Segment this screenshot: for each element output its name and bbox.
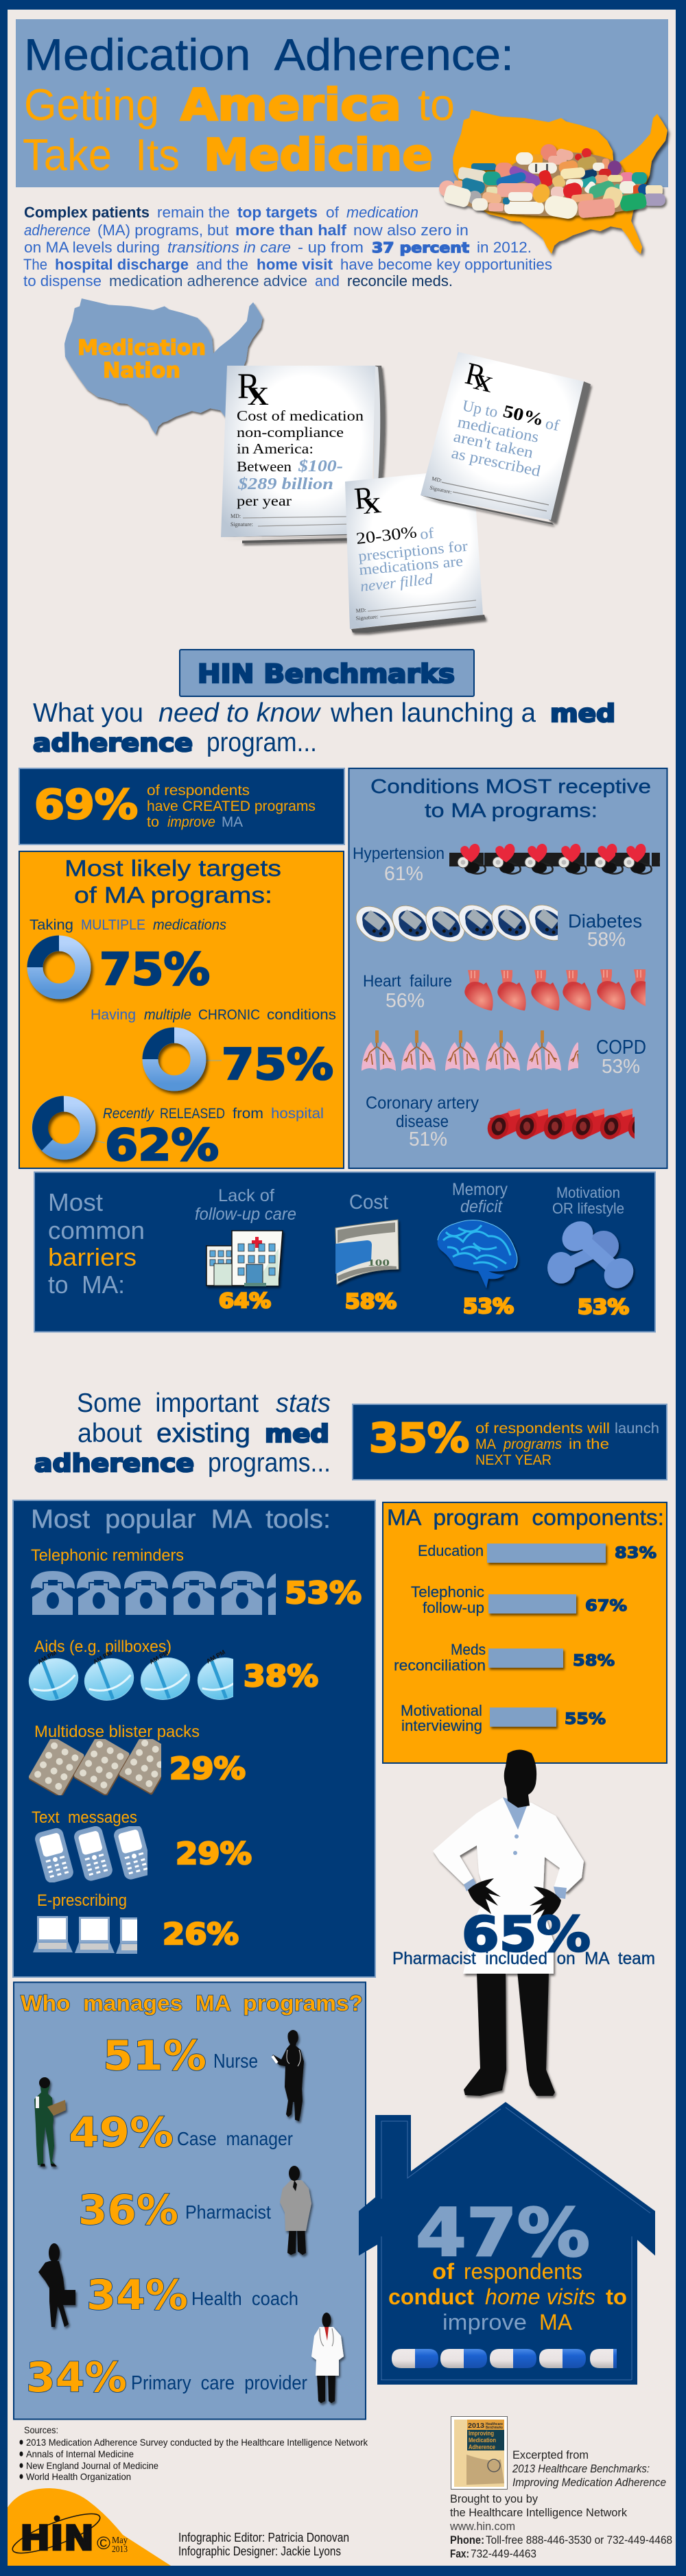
role: nurse [103, 2030, 304, 2121]
bar chart: Education [418, 1542, 484, 1559]
panel heading: MA program components: [387, 1505, 664, 1530]
target: multiple chronic conditions: Having [91, 1007, 136, 1023]
tool: aids [29, 1640, 318, 1701]
tool: text messages [32, 1808, 252, 1884]
intro text: The [23, 256, 47, 273]
tool: aids: AM PM [205, 1649, 226, 1665]
icon: report cover: Benchmarks [486, 2426, 503, 2430]
subheading: existing programs: existing [156, 1419, 250, 1448]
prescription note: cost: $100- [298, 458, 343, 475]
target: multiple medications [29, 917, 226, 995]
medication nation map: Nation [103, 359, 180, 383]
title [23, 29, 514, 181]
prescription note: never filled: prescriptions for [357, 537, 469, 565]
panel: who manages [14, 1983, 366, 2419]
panel heading: of MA programs: [74, 882, 272, 908]
title: America [180, 80, 401, 131]
intro text: transitions in care [167, 239, 291, 256]
barrier: motivation or lifestyle: OR lifestyle [552, 1200, 624, 1217]
intro text: adherence [24, 222, 91, 239]
prescription note: cost: non-compliance [237, 424, 344, 440]
prescription note: not taken: R [462, 355, 489, 394]
prescription note: cost [221, 366, 385, 543]
home visits text: MA [539, 2310, 573, 2335]
barrier: follow-up care: follow-up care [195, 1205, 296, 1224]
publisher info: Improving Medication Adherence [512, 2476, 666, 2489]
intro text: medication [346, 204, 418, 221]
tool: aids: Aids (e.g. pillboxes) [34, 1638, 172, 1656]
barrier: cost: Cost [349, 1191, 389, 1214]
callout: 69%: of respondents [147, 783, 250, 799]
condition: coronary artery disease: disease [396, 1112, 449, 1131]
role: pharmacist [78, 2166, 311, 2255]
subheading: existing programs: Some important [77, 1389, 259, 1418]
icon: US map with pill pile [439, 110, 667, 254]
target: recently released: hospital [271, 1106, 324, 1122]
bar chart [394, 1542, 657, 1734]
prescription note: cost: Signature: [230, 521, 253, 528]
target: multiple chronic conditions: conditions [267, 1007, 336, 1023]
intro text: home visit [257, 256, 333, 273]
icon: report cover: Medication [469, 2437, 496, 2444]
target: multiple chronic conditions: multiple [144, 1007, 191, 1023]
barrier: follow-up care: 64% [219, 1289, 271, 1312]
panel heading: barriers [48, 1243, 137, 1271]
barrier: memory deficit: 53% [463, 1295, 514, 1318]
target: multiple chronic conditions: CHRONIC [198, 1007, 260, 1023]
intro text: to dispense [23, 272, 102, 289]
intro text: have become key opportunities [340, 256, 552, 273]
panel heading [370, 776, 651, 822]
home visits text: conduct [388, 2284, 474, 2309]
credits [178, 2531, 349, 2558]
stat: 65% pharmacist: 65% [462, 1906, 591, 1963]
role: pharmacist: Pharmacist [185, 2201, 271, 2223]
sources [19, 2424, 368, 2482]
bar chart: 58% [573, 1653, 615, 1670]
prescription note: cost: per year [237, 493, 292, 509]
target: recently released: Recently [103, 1106, 154, 1122]
publisher info: 2013 Healthcare Benchmarks: [512, 2462, 650, 2475]
benchmarks heading [180, 650, 474, 696]
condition: diabetes [355, 904, 642, 947]
target: recently released [40, 1104, 324, 1170]
prescription note: cost: Between [237, 458, 292, 475]
logo: HIN: © [97, 2533, 110, 2553]
header panel [16, 19, 668, 187]
tool: multidose blister packs [27, 1723, 246, 1798]
title: Medicine [204, 130, 433, 181]
role: nurse: 51% [103, 2032, 206, 2080]
panel heading: Conditions MOST receptive [370, 776, 651, 798]
icon: report cover: Healthcare [486, 2422, 503, 2426]
prescription note: cost: x [248, 372, 269, 413]
tool: multidose blister packs: 29% [169, 1751, 246, 1786]
callout: 69%: improve [167, 814, 215, 830]
callout: 69%: have CREATED programs [147, 799, 316, 814]
prescription note: not taken: aren't taken [452, 427, 535, 462]
tool: aids: 38% [244, 1659, 318, 1694]
prescription note: not taken: 50% [501, 401, 546, 429]
condition: diabetes: Diabetes [568, 910, 642, 932]
condition: heart failure: 56% [386, 990, 425, 1012]
prescription note: not taken: MD: [431, 475, 442, 484]
prescription note: cost: $289 billion [237, 475, 333, 493]
prescription note: never filled: medications are [358, 552, 464, 578]
publisher info [449, 2448, 672, 2560]
barrier: cost [335, 1191, 399, 1313]
panel: home visits house [359, 2102, 655, 2385]
callout: 35%: 35% [369, 1415, 469, 1461]
condition: hypertension [354, 844, 660, 881]
medication nation map: Medication [78, 336, 206, 360]
callout: 69% [19, 768, 344, 844]
condition: heart failure [363, 969, 659, 1012]
tool: aids: AM PM [92, 1649, 113, 1666]
sources: New England Journal of Medicine [26, 2460, 158, 2471]
bar chart: 67% [585, 1598, 627, 1615]
role: case manager: 49% [69, 2109, 174, 2157]
prescription note: not taken [421, 352, 591, 525]
barrier: follow-up care: Lack of [218, 1186, 274, 1205]
subheading: existing programs: about [78, 1419, 142, 1448]
tool: aids: AM PM [148, 1649, 169, 1666]
prescription note: cost: in America: [237, 440, 314, 457]
intro text: remain the [157, 204, 230, 221]
prescription note: not taken: of [544, 414, 561, 434]
barrier: follow-up care [195, 1186, 296, 1312]
icon: report cover: Improving [469, 2430, 494, 2437]
medication nation map [64, 298, 263, 434]
callout: 35%: NEXT YEAR [475, 1452, 552, 1468]
panel: most likely targets [19, 851, 344, 1170]
publisher info: Excerpted from [512, 2448, 589, 2461]
panel heading: Most [48, 1188, 103, 1216]
subheading: need to know: What you [33, 698, 143, 728]
role: primary care provider [26, 2313, 344, 2403]
intro text: in 2012. [477, 239, 532, 256]
title: Medication Adherence: [24, 29, 514, 80]
barrier: motivation or lifestyle: Motivation [556, 1184, 620, 1201]
title: Getting [24, 80, 159, 130]
tool: e-prescribing: E-prescribing [37, 1891, 127, 1910]
target: multiple chronic conditions: 75% [222, 1039, 333, 1089]
intro text: and the [196, 256, 248, 273]
home visits text: improve [442, 2310, 527, 2335]
credits: Infographic Designer: Jackie Lyons [178, 2544, 341, 2558]
sources: Annals of Internal Medicine [26, 2448, 134, 2459]
title: to [418, 80, 455, 130]
intro text: - up from [298, 239, 364, 256]
panel heading: to MA programs: [425, 800, 598, 822]
callout: 69%: MA [222, 814, 243, 830]
role: primary care provider: Primary care provider [131, 2372, 307, 2394]
condition: coronary artery disease: 51% [409, 1129, 447, 1150]
publisher info: Brought to you by [450, 2492, 538, 2505]
prescription note: never filled: 20-30% [355, 523, 418, 548]
pill pile [439, 144, 665, 220]
prescription note: never filled: MD: [355, 607, 366, 614]
role: health coach [38, 2243, 298, 2327]
barrier: memory deficit [438, 1180, 517, 1318]
condition: COPD [362, 1030, 646, 1078]
intro text: now also zero in [353, 222, 469, 239]
target: multiple medications: 75% [99, 945, 210, 995]
bar chart: Meds [451, 1641, 486, 1658]
intro text: of [326, 204, 340, 221]
condition: COPD: COPD [596, 1037, 646, 1059]
callout: 35%: programs [503, 1437, 562, 1452]
prescription note: never filled: R [353, 480, 375, 516]
barrier: cost: 100 [368, 1258, 390, 1268]
intro text: 37 percent [372, 239, 470, 256]
bar chart: reconciliation [394, 1657, 486, 1674]
bar chart: Motivational [401, 1702, 482, 1719]
condition: hypertension: Hypertension [353, 844, 445, 863]
role: case manager [34, 2077, 293, 2166]
prescription note: never filled: of [419, 524, 435, 543]
logo: HIN: May [112, 2536, 128, 2546]
intro text: (MA) programs, but [97, 222, 228, 239]
prescription note: not taken: Signature: [429, 484, 453, 495]
bar chart: 83% [615, 1545, 657, 1562]
stat: 65% pharmacist [392, 1906, 655, 1968]
logo: HIN: 2013 [112, 2544, 128, 2555]
home visits text [388, 2259, 627, 2335]
target: multiple chronic conditions [91, 1007, 336, 1089]
icon: report cover [451, 2416, 508, 2489]
tool: telephonic reminders: Telephonic reminders [31, 1546, 184, 1565]
panel heading: common [48, 1216, 145, 1244]
bar chart: Telephonic [411, 1583, 484, 1600]
prescription note: cost: MD: [230, 513, 241, 519]
condition: coronary artery disease: Coronary artery [366, 1094, 479, 1113]
subheading: need to know [33, 698, 615, 757]
home visits text: to [606, 2284, 627, 2309]
bar chart: interviewing [401, 1717, 482, 1734]
barrier: motivation or lifestyle [547, 1184, 639, 1319]
condition: hypertension: 61% [384, 863, 423, 885]
barrier: memory deficit: Memory [452, 1180, 508, 1199]
callout: 35%: MA [475, 1437, 496, 1452]
prescription note: never filled [345, 469, 486, 633]
condition: diabetes: 58% [587, 929, 626, 951]
subheading: existing programs: med [265, 1420, 329, 1448]
title: Take Its [23, 130, 180, 180]
role: primary care provider: 34% [26, 2354, 127, 2402]
callout: 35% [353, 1404, 667, 1480]
logo: HIN [8, 2488, 171, 2566]
publisher info: the Healthcare Intelligence Network [450, 2506, 627, 2519]
sources: Sources: [24, 2424, 58, 2435]
intro text: and [315, 272, 340, 289]
panel: barriers [34, 1172, 655, 1332]
panel heading [48, 1188, 145, 1299]
prescription note: not taken: as prescribed [450, 444, 543, 480]
tool: text messages: Text messages [32, 1808, 137, 1827]
publisher info: Fax: [450, 2547, 469, 2560]
subheading: existing programs: stats [276, 1389, 331, 1418]
intro text: hospital discharge [55, 256, 189, 273]
stat: 47%: 47% [416, 2195, 590, 2271]
role: health coach: Health coach [191, 2288, 298, 2309]
home visits text: respondents [464, 2259, 582, 2284]
figure: pharmacist [433, 1749, 584, 2096]
prescription note: not taken: medications [456, 413, 541, 446]
tool: e-prescribing [33, 1891, 239, 1954]
tool: multidose blister packs: Multidose blister packs [34, 1723, 200, 1741]
prescription note: never filled: Signature: [355, 613, 379, 622]
credits: Infographic Editor: Patricia Donovan [178, 2531, 349, 2544]
target: recently released: 62% [105, 1120, 219, 1170]
prescription note: cost: Cost of medication [237, 407, 364, 424]
target: recently released: from [233, 1106, 263, 1122]
bar chart: 55% [565, 1711, 606, 1728]
condition: heart failure: Heart failure [363, 972, 452, 991]
publisher info: 732-449-4463 [471, 2547, 536, 2560]
tool: e-prescribing: 26% [163, 1917, 239, 1952]
logo: HIN: HIN [20, 2518, 94, 2558]
callout: 35%: of respondents will [475, 1421, 610, 1437]
home visits text: of [432, 2259, 454, 2284]
subheading: need to know: adherence [33, 729, 193, 757]
target: multiple medications: medications [153, 917, 226, 933]
sources: World Health Organization [26, 2471, 131, 2482]
home visits text: home visits [485, 2284, 595, 2309]
intro text: reconcile meds. [347, 272, 453, 289]
role: nurse: Nurse [213, 2051, 258, 2072]
callout: 69%: to [147, 814, 159, 830]
role: health coach: 34% [86, 2271, 188, 2319]
prescription note: not taken: x [471, 361, 497, 399]
stat: 65% pharmacist: Pharmacist included on MA team [392, 1949, 655, 1968]
subheading: need to know: program... [206, 728, 317, 757]
tool: text messages: 29% [176, 1836, 252, 1871]
tool: telephonic reminders [31, 1546, 362, 1615]
role: pharmacist: 36% [78, 2186, 178, 2234]
benchmarks heading: HIN Benchmarks [198, 659, 455, 689]
intro text: top targets [237, 204, 318, 221]
callout: 69%: 69% [34, 781, 138, 828]
intro text [23, 204, 552, 289]
callout: 35%: launch [615, 1421, 659, 1437]
prescription note: cost: R [237, 366, 261, 406]
panel heading: Most likely targets [64, 855, 281, 881]
condition: COPD: 53% [602, 1056, 640, 1078]
publisher info: www.hin.com [449, 2520, 515, 2533]
bar chart: follow-up [423, 1599, 484, 1616]
subheading: need to know: when launching a [330, 698, 536, 728]
subheading: need to know: need to know [158, 698, 322, 728]
target: multiple medications: Taking [29, 917, 73, 933]
target: multiple medications: MULTIPLE [81, 917, 145, 933]
panel heading: Most popular MA tools: [31, 1505, 331, 1534]
tool: telephonic reminders: 53% [285, 1576, 362, 1611]
panel heading: to MA: [48, 1271, 125, 1299]
publisher info: Phone: [450, 2533, 484, 2547]
prescription note: never filled: x [361, 484, 383, 521]
intro text: Complex patients [24, 204, 150, 221]
condition: coronary artery disease [366, 1096, 635, 1146]
icon: report cover: Adherence [469, 2444, 495, 2450]
prescription note: not taken: Up to [461, 397, 499, 421]
subheading: existing programs: programs... [208, 1448, 331, 1478]
prescription note: never filled: never filled [359, 570, 434, 595]
intro text: more than half [235, 222, 347, 239]
barrier: memory deficit: deficit [460, 1197, 503, 1216]
panel: conditions [348, 768, 686, 1168]
capsule row [392, 2349, 637, 2368]
panel: MA tools [13, 1500, 375, 1977]
barrier: motivation or lifestyle: 53% [578, 1295, 629, 1319]
subheading: existing programs [34, 1389, 331, 1478]
role: case manager: Case manager [177, 2128, 293, 2149]
barrier: cost: 58% [345, 1290, 397, 1313]
panel heading: Who manages MA programs? [21, 1991, 363, 2016]
sources: 2013 Medication Adherence Survey conducted by the Healthcare Intelligence Network [26, 2437, 368, 2448]
panel heading [64, 855, 281, 908]
intro text: on MA levels during [24, 239, 160, 256]
callout: 35%: in the [569, 1437, 609, 1452]
intro text: medication adherence advice [109, 272, 307, 289]
subheading: need to know: med [550, 700, 615, 728]
tool: aids: AM PM [36, 1649, 58, 1666]
target: recently released: RELEASED [160, 1106, 225, 1122]
icon: report cover: 2013 [468, 2422, 484, 2430]
panel: MA program components [383, 1502, 667, 1763]
subheading: existing programs: adherence [34, 1450, 194, 1478]
